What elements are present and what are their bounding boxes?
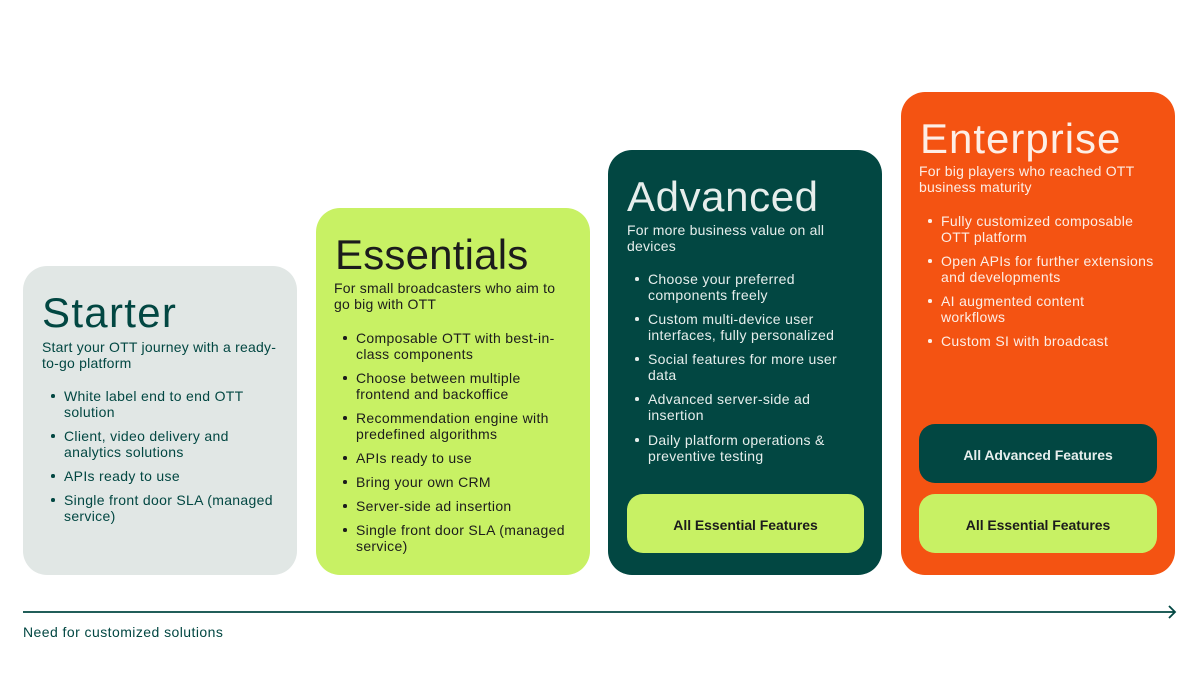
feature list: Essentials: Recommendation engine with (356, 410, 549, 426)
subtitle: Advanced: For more business value on all (627, 222, 824, 238)
feature list: Essentials: Choose between multiple (356, 370, 521, 386)
feature list: Essentials: APIs ready to use (356, 450, 472, 466)
heading: Advanced: Advanced (627, 173, 819, 220)
subtitle: Starter: Start your OTT journey with a ready- (42, 339, 276, 355)
feature list: Essentials: frontend and backoffice (356, 386, 509, 402)
feature list: Enterprise: workflows (941, 309, 1005, 325)
feature list: Starter: White label end to end OTT (64, 388, 244, 404)
feature list: Advanced: Daily platform operations & (648, 432, 825, 448)
feature list: Essentials: Server-side ad insertion (356, 498, 512, 514)
feature list: Enterprise: AI augmented content (941, 293, 1084, 309)
button: All Essential Features: All Essential Features (673, 517, 818, 533)
arrow: need for customized solutions axis (23, 605, 1176, 619)
panel: Essentials (316, 208, 590, 575)
feature list: Starter: service) (64, 508, 116, 524)
button: All Advanced Features (919, 424, 1157, 483)
subtitle: Enterprise: For big players who reached OTT (919, 163, 1134, 179)
feature list: Advanced: Choose your preferred (648, 271, 795, 287)
feature list: Essentials: predefined algorithms (356, 426, 497, 442)
button: All Essential Features (919, 494, 1157, 553)
feature list: Starter: analytics solutions (64, 444, 184, 460)
heading: Essentials: Essentials (335, 231, 528, 278)
subtitle: Starter: to-go platform (42, 355, 131, 371)
feature list: Starter: Client, video delivery and (64, 428, 229, 444)
feature list: Enterprise: and developments (941, 269, 1061, 285)
subtitle: Advanced (627, 222, 824, 254)
panel: Advanced (608, 150, 882, 575)
subtitle: Starter (42, 339, 276, 371)
feature list: Enterprise: Fully customized composable (941, 213, 1133, 229)
feature list: Essentials: Single front door SLA (managed (356, 522, 565, 538)
feature list: Enterprise: OTT platform (941, 229, 1027, 245)
feature list: Advanced: components freely (648, 287, 768, 303)
heading: Starter: Starter (42, 289, 177, 336)
feature list: Starter: APIs ready to use (64, 468, 180, 484)
axis label: Need for customized solutions (23, 624, 223, 640)
feature list: Advanced: insertion (648, 407, 704, 423)
feature list: Essentials: Bring your own CRM (356, 474, 491, 490)
feature list: Essentials: Composable OTT with best-in- (356, 330, 555, 346)
subtitle: Enterprise: business maturity (919, 179, 1032, 195)
feature list: Advanced: data (648, 367, 677, 383)
panel: Enterprise (901, 92, 1175, 575)
subtitle: Enterprise (919, 163, 1134, 195)
feature list: Starter: Single front door SLA (managed (64, 492, 273, 508)
feature list: Enterprise: Custom SI with broadcast (941, 333, 1108, 349)
feature list: Advanced: Custom multi-device user (648, 311, 814, 327)
subtitle: Essentials (334, 280, 555, 312)
heading: Enterprise: Enterprise (920, 115, 1121, 162)
subtitle: Advanced: devices (627, 238, 676, 254)
panel: Starter (23, 266, 297, 575)
button: All Advanced Features: All Advanced Features (963, 447, 1113, 463)
feature list: Advanced: interfaces, fully personalized (648, 327, 834, 343)
button: All Essential Features (627, 494, 864, 553)
feature list: Essentials: class components (356, 346, 473, 362)
feature list: Enterprise: Open APIs for further extensions (941, 253, 1154, 269)
feature list: Essentials: service) (356, 538, 408, 554)
subtitle: Essentials: For small broadcasters who aim to (334, 280, 555, 296)
subtitle: Essentials: go big with OTT (334, 296, 436, 312)
feature list: Advanced (635, 271, 837, 464)
button: All Essential Features: All Essential Features (966, 517, 1110, 533)
feature list: Advanced: Social features for more user (648, 351, 837, 367)
feature list: Enterprise (928, 213, 1154, 349)
feature list: Advanced: preventive testing (648, 448, 764, 464)
feature list: Starter (51, 388, 273, 524)
feature list: Starter: solution (64, 404, 115, 420)
feature list: Essentials (343, 330, 565, 554)
feature list: Advanced: Advanced server-side ad (648, 391, 810, 407)
